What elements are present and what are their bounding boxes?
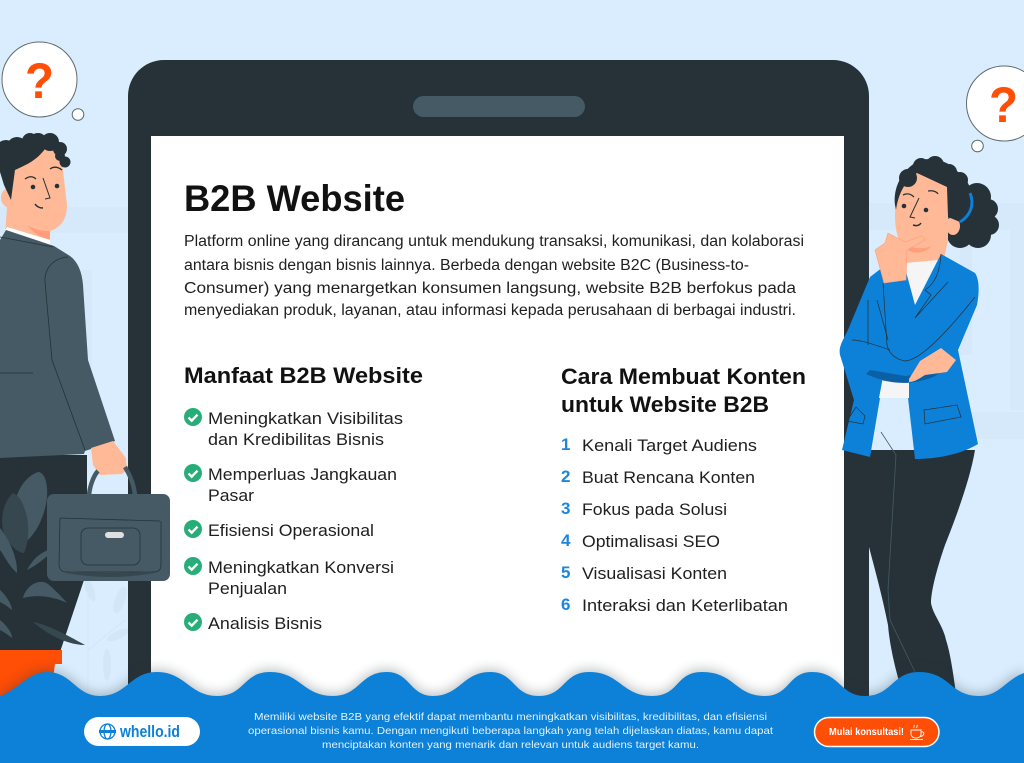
benefit 5: Analisis Bisnis [208, 614, 322, 633]
neck and face [895, 173, 948, 266]
step 4: Optimalisasi SEO [582, 532, 720, 551]
benefit 4: Meningkatkan Konversi [208, 558, 394, 577]
benefit 2: Pasar [208, 486, 254, 505]
left thought bubble [2, 42, 84, 120]
title: B2B Website [184, 178, 405, 219]
flower pot [0, 650, 62, 700]
logo pill [84, 717, 200, 746]
trousers [848, 450, 975, 700]
benefit 3: Efisiensi Operasional [208, 521, 374, 540]
phone screen [151, 136, 844, 740]
benefit 4 [184, 557, 394, 598]
benefit 1 [184, 408, 403, 449]
bag handle [89, 467, 135, 495]
heading: content steps [561, 364, 806, 417]
footer text: Memiliki website B2B yang efektif dapat membantu meningkatkan visibilitas, kredibilitas, dan efisiensi [254, 711, 767, 723]
step 5: 5 [561, 563, 570, 582]
hair [0, 133, 70, 200]
neck shadow [28, 225, 50, 239]
background: faint plant [82, 577, 131, 690]
jacket [0, 230, 115, 458]
hair bun [947, 183, 999, 248]
benefits list [184, 408, 403, 633]
icon: coffee cup [910, 725, 924, 740]
jacket lower fold [866, 370, 940, 383]
heading: content steps: untuk Website B2B [561, 392, 769, 417]
step 3: 3 [561, 499, 570, 518]
jacket seams [0, 237, 85, 450]
phone frame [128, 60, 869, 740]
intro paragraph: Consumer) yang menargetkan konsumen langsung, website B2B berfokus pada [184, 280, 796, 297]
logo pill: whello.id [119, 722, 180, 741]
step 6: 6 [561, 595, 570, 614]
step 2: Buat Rencana Konten [582, 468, 755, 487]
benefit 2: Memperluas Jangkauan [208, 465, 397, 484]
briefcase [47, 494, 170, 581]
trouser seam [881, 432, 915, 672]
heading: content steps: Cara Membuat Konten [561, 364, 806, 389]
jacket details [847, 254, 975, 424]
benefit 4: Penjualan [208, 579, 287, 598]
intro paragraph [184, 233, 804, 319]
neck and face [1, 148, 67, 245]
footer text: operasional bisnis kamu. Dengan mengikuti beberapa langkah yang telah dijelaskan diatas, kamu dapat [248, 725, 773, 737]
benefit 2 [184, 464, 397, 505]
background: faint room shapes [0, 203, 1024, 439]
benefit 1: dan Kredibilitas Bisnis [208, 430, 384, 449]
step 1: Kenali Target Audiens [582, 436, 757, 455]
step 5: Visualisasi Konten [582, 564, 727, 583]
intro paragraph: antara bisnis dengan bisnis lainnya. Berbeda dengan website B2C (Business-to- [184, 257, 749, 274]
face details [25, 167, 62, 208]
white shirt at waist [879, 377, 909, 398]
step 4: 4 [561, 531, 571, 550]
jacket [840, 254, 979, 459]
step 2: 2 [561, 467, 570, 486]
right thought bubble [966, 66, 1024, 152]
ear [946, 217, 960, 235]
face details [903, 191, 938, 226]
shirt [904, 260, 938, 305]
hand [91, 441, 127, 475]
footer text [248, 711, 773, 751]
hand on arm [909, 348, 956, 382]
wave shadow [0, 670, 1024, 763]
man with briefcase [0, 133, 170, 700]
intro paragraph: menyediakan produk, layanan, atau informasi kepada perusahaan di berbagai industri. [184, 302, 796, 319]
hand on chin [875, 233, 925, 283]
benefit 1: Meningkatkan Visibilitas [208, 409, 403, 428]
call-to-action button [814, 718, 939, 746]
left thought bubble: ? [25, 53, 54, 109]
step 6: Interaksi dan Keterlibatan [582, 596, 788, 615]
heading: benefits: Manfaat B2B Website [184, 363, 423, 388]
hair band [960, 193, 972, 222]
phone speaker [413, 96, 585, 117]
shirt collar [5, 227, 50, 246]
chin shadow [908, 245, 932, 252]
footer wave [0, 672, 1024, 763]
step 1: 1 [561, 435, 570, 454]
call-to-action button: Mulai konsultasi! [829, 727, 904, 738]
steps list [561, 435, 788, 615]
belt [883, 376, 908, 383]
woman thinking [840, 156, 999, 700]
plant [0, 472, 85, 645]
footer text: menciptakan konten yang menarik dan relevan untuk audiens target kamu. [322, 739, 699, 751]
step 3: Fokus pada Solusi [582, 500, 727, 519]
icon: globe [99, 724, 116, 739]
hair cap [895, 156, 973, 222]
intro paragraph: Platform online yang dirancang untuk mendukung transaksi, komunikasi, dan kolaborasi [184, 233, 804, 250]
right thought bubble: ? [989, 77, 1018, 133]
trousers [0, 455, 87, 652]
